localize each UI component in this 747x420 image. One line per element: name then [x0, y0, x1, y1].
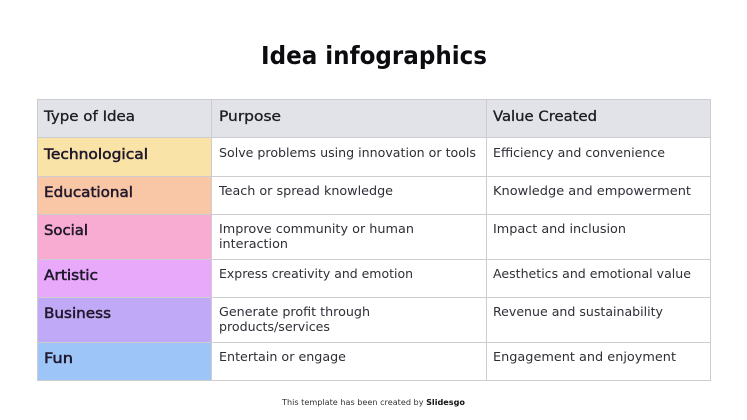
row: educational: Teach or spread knowledge [218, 184, 393, 198]
row: social: Social [44, 223, 88, 239]
row: artistic: Artistic [44, 268, 98, 284]
row: social: Impact and inclusion [493, 222, 626, 236]
row: business [38, 297, 663, 342]
row: technological [38, 138, 665, 176]
row: technological: Solve problems using innovation or tools [219, 146, 476, 160]
row: social: Improve community or human [219, 222, 414, 236]
row: business: products/services [219, 320, 330, 334]
header row: Purpose [219, 109, 281, 125]
row: educational: Knowledge and empowerment [493, 184, 691, 198]
row: fun [38, 342, 676, 380]
header row [38, 99, 711, 138]
row: educational [38, 176, 691, 214]
row: fun: Engagement and enjoyment [493, 350, 676, 364]
title: Idea infographics [261, 41, 487, 70]
row: fun: Fun [44, 351, 73, 367]
row: technological: Technological [43, 147, 148, 163]
header row: Value Created [493, 109, 597, 125]
footer credit: This template has been created by Slidesgo [281, 398, 465, 407]
row: artistic [38, 259, 691, 297]
row: educational: Educational [44, 185, 133, 201]
row: business: Revenue and sustainability [493, 305, 663, 319]
row: business: Generate profit through [219, 305, 370, 319]
row: artistic: Aesthetics and emotional value [493, 267, 691, 281]
row: fun: Entertain or engage [219, 350, 346, 364]
row: social: interaction [219, 237, 288, 251]
row: social [38, 214, 626, 259]
row: technological: Efficiency and convenience [493, 146, 665, 160]
row: artistic: Express creativity and emotion [219, 267, 413, 281]
header row: Type of Idea [43, 109, 135, 125]
row: business: Business [44, 306, 111, 322]
table [38, 99, 711, 380]
